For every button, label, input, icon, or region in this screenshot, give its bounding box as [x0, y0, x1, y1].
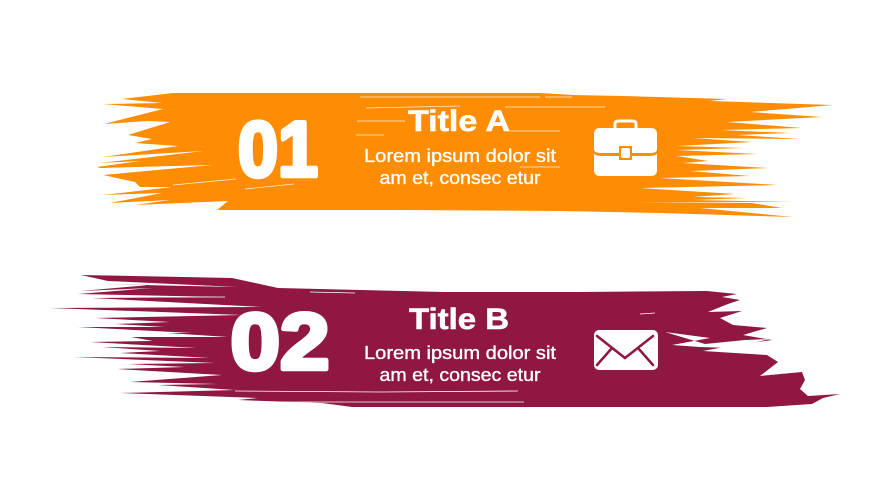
- maroon brush stroke: [50, 275, 840, 407]
- body text B: Lorem ipsum dolor sit: [364, 343, 556, 363]
- body text A: Lorem ipsum dolor sit: [364, 146, 556, 166]
- icon: briefcase: [594, 121, 657, 176]
- body text A: am et, consec etur: [380, 168, 540, 188]
- brush streaks and gaps: [165, 292, 770, 402]
- icon: envelope: [594, 330, 658, 370]
- orange brush stroke: [97, 93, 833, 217]
- body text B: am et, consec etur: [380, 365, 540, 385]
- title B: Title B: [409, 303, 509, 336]
- brush streaks: [173, 97, 605, 189]
- number 02: 02: [230, 297, 330, 386]
- panel: item 02 maroon banner: [50, 275, 840, 407]
- number 01: 01: [238, 105, 318, 193]
- panel: item 01 orange banner: [97, 93, 833, 217]
- title A: Title A: [408, 105, 510, 138]
